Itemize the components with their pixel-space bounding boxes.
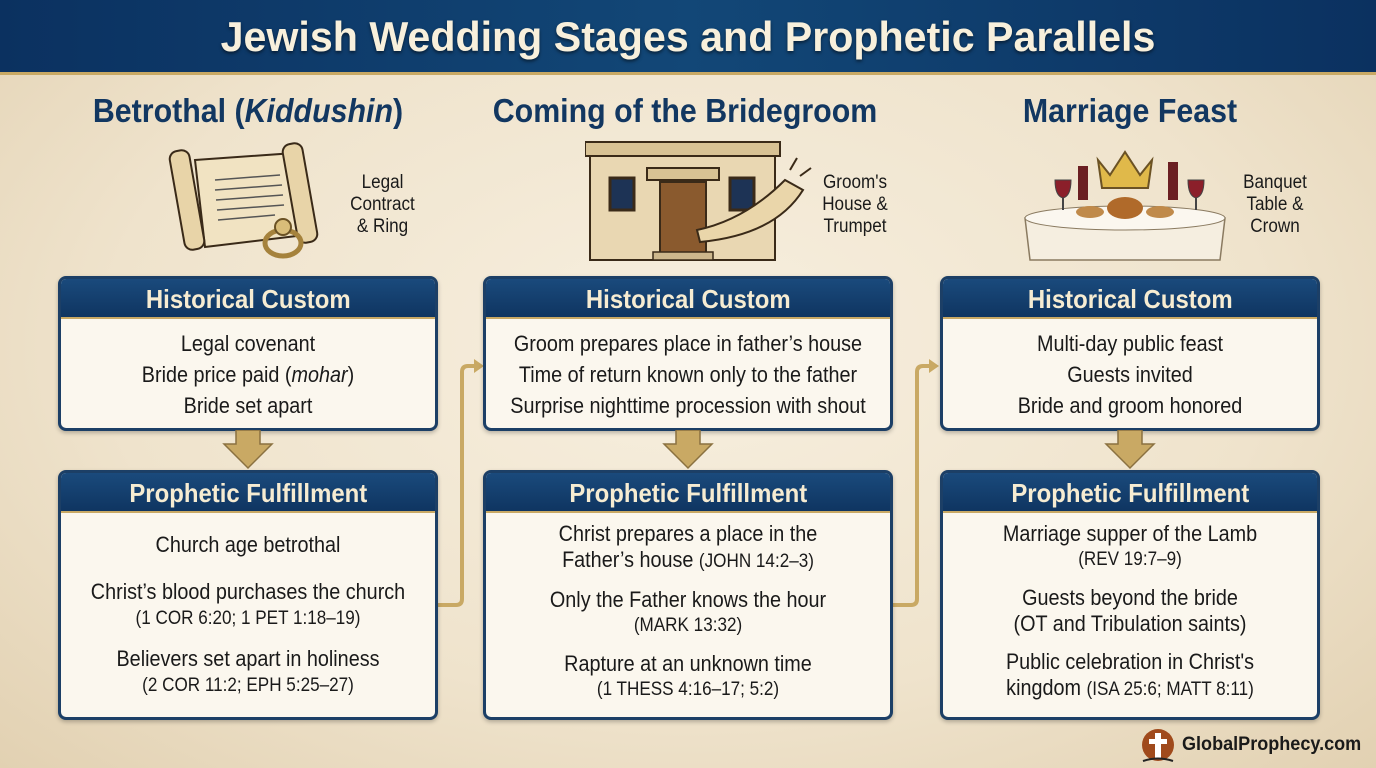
panel: betrothal historical: Bride price paid (mohar) bbox=[142, 362, 354, 387]
caption: legal contract: & Ring bbox=[357, 216, 408, 237]
caption: groom's house: House & bbox=[822, 194, 888, 215]
panel: betrothal prophetic: Christ’s blood purchases the church bbox=[91, 579, 405, 604]
caption: banquet table: Table & bbox=[1246, 194, 1304, 215]
panel: bridegroom prophetic: Father’s house (JOHN 14:2–3) bbox=[562, 547, 814, 572]
panel: betrothal historical bbox=[58, 276, 438, 431]
stage title: coming of bridegroom: Coming of the Bridegroom bbox=[493, 92, 877, 129]
panel: betrothal historical: Legal covenant bbox=[181, 331, 315, 356]
panel: bridegroom historical: Time of return known only to the father bbox=[519, 362, 857, 387]
panel: betrothal historical: Historical Custom bbox=[146, 284, 350, 314]
icon: banquet table and crown bbox=[1024, 150, 1226, 261]
panel: feast historical: Historical Custom bbox=[1028, 284, 1232, 314]
panel: betrothal prophetic: (2 COR 11:2; EPH 5:25–27) bbox=[142, 675, 354, 696]
stage title: marriage feast: Marriage Feast bbox=[1023, 92, 1237, 129]
caption: groom's house: Trumpet bbox=[823, 216, 887, 237]
panel: feast prophetic: (REV 19:7–9) bbox=[1078, 549, 1182, 570]
panel: bridegroom prophetic: Only the Father knows the hour bbox=[550, 587, 826, 612]
panel: betrothal prophetic bbox=[58, 470, 438, 720]
arrow: bridegroom down bbox=[662, 430, 714, 469]
panel: bridegroom historical: Historical Custom bbox=[586, 284, 790, 314]
panel: bridegroom prophetic: Prophetic Fulfillment bbox=[569, 478, 807, 508]
caption: legal contract: Legal bbox=[362, 172, 403, 193]
panel: bridegroom historical: Surprise nighttime procession with shout bbox=[510, 393, 866, 418]
caption: groom's house: Groom's bbox=[823, 172, 887, 193]
panel: feast prophetic: Prophetic Fulfillment bbox=[1011, 478, 1249, 508]
panel: betrothal prophetic: Prophetic Fulfillment bbox=[129, 478, 367, 508]
panel: feast prophetic: Guests beyond the bride bbox=[1022, 585, 1238, 610]
caption: banquet table bbox=[1243, 172, 1307, 237]
header bar: Jewish Wedding Stages and Prophetic Parallels bbox=[221, 13, 1155, 60]
caption: groom's house bbox=[822, 172, 888, 237]
panel: feast prophetic: (OT and Tribulation saints) bbox=[1014, 611, 1246, 636]
panel: bridegroom prophetic bbox=[483, 470, 893, 720]
panel: betrothal prophetic: Church age betrothal bbox=[156, 532, 340, 557]
caption: legal contract bbox=[350, 172, 415, 237]
icon: house and shofar bbox=[585, 141, 812, 261]
logo: GlobalProphecy.com: GlobalProphecy.com bbox=[1182, 734, 1361, 755]
caption: banquet table: Banquet bbox=[1243, 172, 1307, 193]
caption: banquet table: Crown bbox=[1250, 216, 1300, 237]
logo: GlobalProphecy.com bbox=[1142, 729, 1361, 762]
panel: feast prophetic: Public celebration in Christ's bbox=[1006, 649, 1254, 674]
caption: legal contract: Contract bbox=[350, 194, 415, 215]
panel: betrothal historical: Bride set apart bbox=[184, 393, 312, 418]
panel: bridegroom historical bbox=[483, 276, 893, 431]
arrow: betrothal down bbox=[222, 430, 274, 469]
panel: bridegroom prophetic: Rapture at an unknown time bbox=[564, 651, 812, 676]
panel: feast prophetic: Marriage supper of the Lamb bbox=[1003, 521, 1257, 546]
panel: bridegroom prophetic: (1 THESS 4:16–17; 5:2) bbox=[597, 679, 779, 700]
panel: feast prophetic: kingdom (ISA 25:6; MATT 8:11) bbox=[1006, 675, 1254, 700]
panel: feast historical: Multi-day public feast bbox=[1037, 331, 1223, 356]
panel: feast historical bbox=[940, 276, 1320, 431]
header bar bbox=[0, 0, 1376, 75]
stage title: betrothal: Betrothal (Kiddushin) bbox=[93, 92, 403, 129]
panel: feast historical: Guests invited bbox=[1067, 362, 1193, 387]
panel: bridegroom prophetic: (MARK 13:32) bbox=[634, 615, 742, 636]
icon: scroll and ring bbox=[168, 142, 318, 258]
panel: bridegroom prophetic: Christ prepares a place in the bbox=[559, 521, 817, 546]
panel: betrothal prophetic: (1 COR 6:20; 1 PET 1:18–19) bbox=[136, 608, 360, 629]
arrow: feast down bbox=[1104, 430, 1156, 469]
panel: betrothal prophetic: Believers set apart in holiness bbox=[116, 646, 380, 671]
panel: feast prophetic bbox=[940, 470, 1320, 720]
panel: bridegroom historical: Groom prepares place in father’s house bbox=[514, 331, 862, 356]
panel: feast historical: Bride and groom honored bbox=[1018, 393, 1242, 418]
